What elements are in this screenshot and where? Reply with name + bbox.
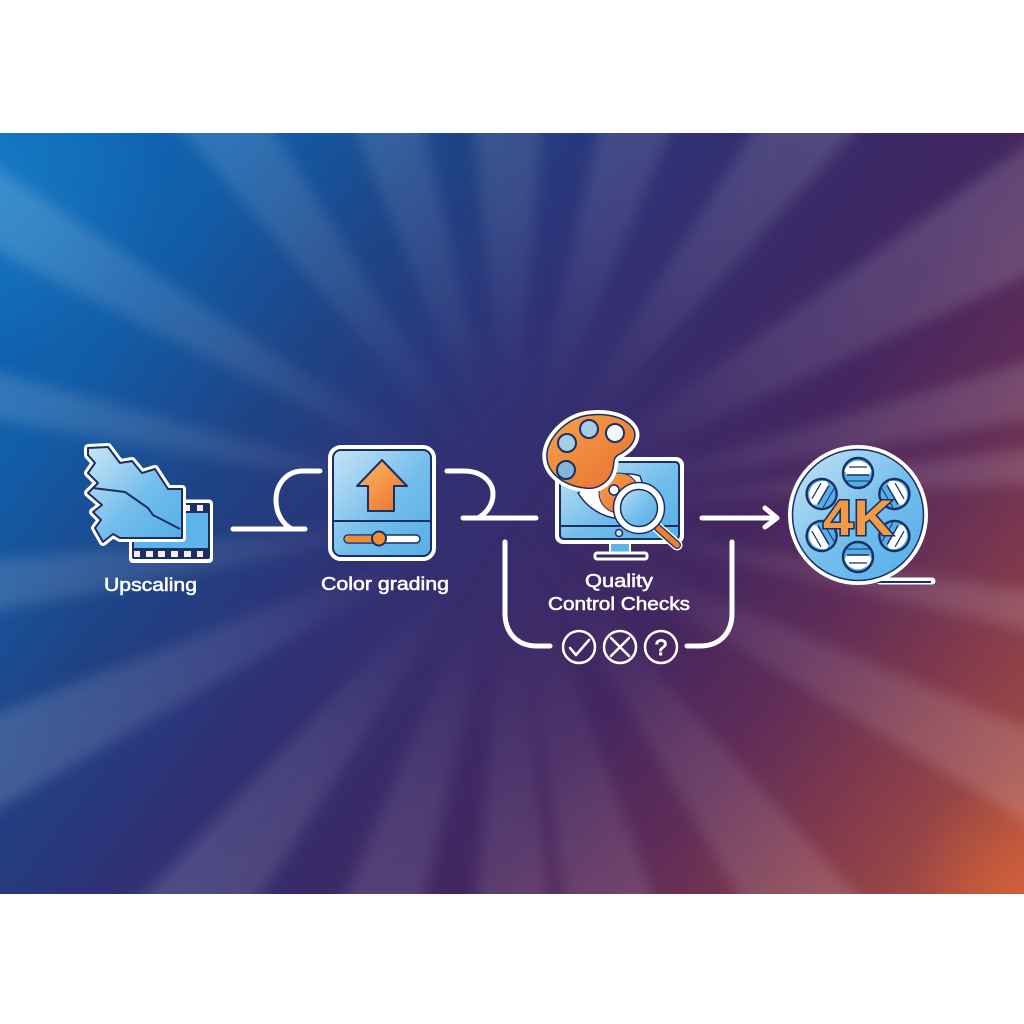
jagged image fragment [88,447,182,542]
slider [344,532,420,546]
label: Quality Control Checks: Control Checks [548,593,690,614]
icon: question mark circle [645,631,677,663]
film strip [129,500,213,563]
icon: cross circle [604,631,636,663]
label: Quality Control Checks: Quality [585,570,654,591]
background panel with sunburst [0,133,1024,894]
icon: check mark circle [563,631,595,663]
label: Color grading: Color grading [321,573,449,594]
label: Upscaling: Upscaling [104,574,197,595]
connector: upscaling to color grading [233,471,320,529]
up arrow [357,460,407,511]
icon: upscaling film and jagged image [88,447,213,563]
icon: monitor with palette and magnifier [547,415,682,559]
icon: question mark circle: ? [655,635,667,660]
palette [547,415,635,488]
arrow to final reel [702,508,777,527]
4K label: 4K [823,490,893,546]
bracket around quality checks [505,542,732,646]
icon: color grading panel [330,447,434,559]
monitor [557,459,682,559]
icon: 4K film reel [790,447,932,583]
magnifier [614,482,677,545]
connector: color grading to quality control [447,471,536,518]
eye shape on screen [578,473,650,519]
label: Quality Control Checks [548,570,690,614]
